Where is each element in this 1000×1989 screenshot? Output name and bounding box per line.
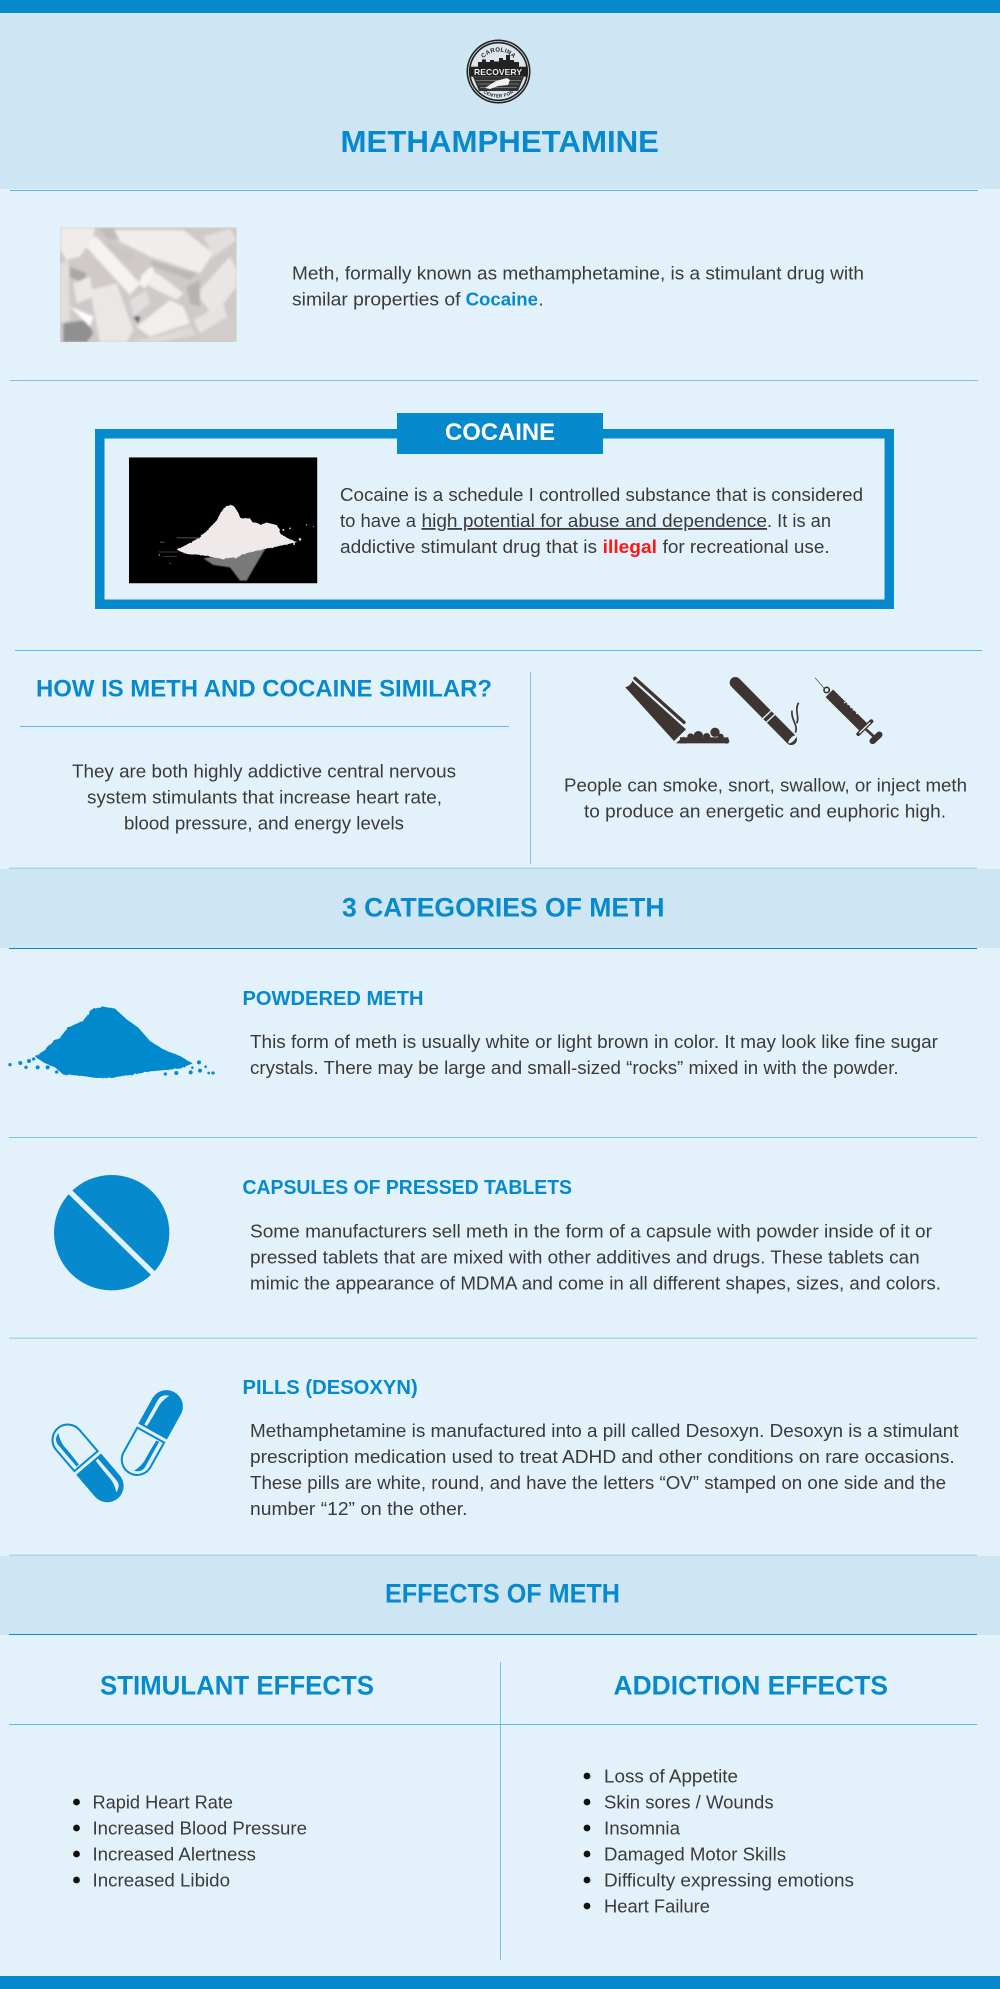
list: addiction effects: Insomnia bbox=[604, 1818, 681, 1838]
cocaine description: to have a bbox=[340, 511, 417, 531]
cocaine description bbox=[340, 485, 863, 557]
intro text: similar properties of bbox=[292, 290, 462, 310]
intro text: . bbox=[538, 290, 544, 310]
heading: 3 categories: 3 CATEGORIES OF METH bbox=[342, 893, 664, 923]
logo: Carolina Recovery Center: RECOVERY bbox=[474, 67, 522, 77]
divider bbox=[9, 1137, 977, 1138]
list: addiction effects: Loss of Appetite bbox=[604, 1766, 738, 1786]
list: addiction effects: Skin sores / Wounds bbox=[604, 1792, 774, 1812]
divider bbox=[9, 1338, 977, 1339]
cocaine description: . It is an bbox=[767, 511, 831, 531]
icon: snorting tube and powder bbox=[624, 678, 729, 744]
cocaine description: Cocaine is a schedule I controlled substance that is considered bbox=[340, 485, 863, 505]
intro text bbox=[292, 264, 864, 310]
list: addiction effects: Difficulty expressing emotions bbox=[604, 1870, 854, 1890]
cocaine description: illegal bbox=[603, 537, 657, 557]
category: capsules of pressed tablets bbox=[242, 1177, 941, 1294]
vertical divider bbox=[500, 1662, 501, 1960]
list: addiction effects: Damaged Motor Skills bbox=[604, 1844, 786, 1864]
icon: syringe bbox=[815, 678, 879, 741]
vertical divider bbox=[530, 672, 531, 864]
right pill bbox=[115, 1384, 189, 1481]
icons: snort, smoke, inject bbox=[624, 678, 879, 745]
heading: addiction effects: ADDICTION EFFECTS bbox=[614, 1670, 888, 1700]
icon: two capsule pills bbox=[45, 1384, 189, 1509]
heading: how similar: HOW IS METH AND COCAINE SIMILAR? bbox=[36, 676, 492, 702]
photo: cocaine pile bbox=[129, 457, 317, 583]
list: stimulant effects: Increased Blood Pressure bbox=[92, 1818, 307, 1838]
icon: cigarette bbox=[735, 683, 799, 745]
list: addiction effects: Heart Failure bbox=[604, 1896, 710, 1916]
routes text bbox=[564, 776, 967, 822]
similarity text: system stimulants that increase heart rate, bbox=[87, 788, 442, 808]
cocaine description: high potential for abuse and dependence bbox=[422, 511, 767, 531]
divider bbox=[15, 650, 982, 651]
list: stimulant effects: Rapid Heart Rate bbox=[92, 1792, 233, 1812]
category: capsules of pressed tablets: CAPSULES OF PRESSED TABLETS bbox=[242, 1177, 572, 1199]
section band: effects bbox=[0, 1554, 1000, 1635]
category: capsules of pressed tablets: pressed tablets that are mixed with other additives and drugs. These tablets can bbox=[250, 1248, 920, 1268]
intro text: Cocaine bbox=[466, 290, 538, 310]
cocaine label bbox=[397, 413, 603, 454]
category: powdered meth: This form of meth is usually white or light brown in color. It may look like fine sugar bbox=[250, 1032, 938, 1052]
list: addiction effects bbox=[584, 1766, 854, 1916]
intro text: Meth, formally known as methamphetamine, is a stimulant drug with bbox=[292, 264, 864, 284]
divider bbox=[10, 190, 978, 191]
logo: Carolina Recovery Center bbox=[466, 40, 530, 104]
photo: meth crystals bbox=[60, 227, 237, 342]
icon: tablet bbox=[54, 1175, 169, 1290]
category: pills (desoxyn) bbox=[242, 1377, 958, 1519]
similarity text bbox=[72, 762, 456, 834]
top bar bbox=[0, 0, 1000, 13]
left pill bbox=[45, 1418, 130, 1509]
cocaine box border bbox=[100, 434, 889, 604]
category: pills (desoxyn): Methamphetamine is manufactured into a pill called Desoxyn. Desoxyn is a stimulant bbox=[250, 1421, 958, 1441]
category: capsules of pressed tablets: mimic the appearance of MDMA and come in all different shapes, sizes, and colors. bbox=[250, 1274, 941, 1294]
title: METHAMPHETAMINE bbox=[340, 124, 659, 159]
category: powdered meth: crystals. There may be large and small-sized “rocks” mixed in with the powder. bbox=[250, 1058, 899, 1078]
heading: effects of meth: EFFECTS OF METH bbox=[385, 1579, 620, 1609]
panel: cocaine bbox=[100, 413, 889, 604]
divider bbox=[20, 726, 509, 727]
category: pills (desoxyn): These pills are white, round, and have the letters “OV” stamped on one side and the bbox=[250, 1473, 946, 1493]
list: stimulant effects: Increased Libido bbox=[92, 1870, 230, 1890]
category: pills (desoxyn): PILLS (DESOXYN) bbox=[242, 1377, 418, 1399]
logo: Carolina Recovery Center: CENTER FOR bbox=[484, 90, 514, 98]
divider bbox=[10, 380, 978, 381]
header band bbox=[0, 13, 1000, 189]
category: pills (desoxyn): prescription medication used to treat ADHD and other conditions on rare occasions. bbox=[250, 1447, 955, 1467]
cocaine description: addictive stimulant drug that is bbox=[340, 537, 597, 557]
cocaine description: for recreational use. bbox=[663, 537, 830, 557]
similarity text: They are both highly addictive central nervous bbox=[72, 762, 456, 782]
category: pills (desoxyn): number “12” on the other. bbox=[250, 1499, 468, 1519]
routes text: to produce an energetic and euphoric high. bbox=[584, 802, 946, 822]
logo: Carolina Recovery Center: CAROLINA bbox=[481, 47, 515, 58]
heading: stimulant effects: STIMULANT EFFECTS bbox=[100, 1670, 374, 1700]
section band: 3 categories bbox=[0, 868, 1000, 949]
category: powdered meth: POWDERED METH bbox=[242, 988, 424, 1010]
cocaine label: COCAINE bbox=[445, 419, 555, 446]
divider bbox=[9, 1724, 977, 1725]
icon: powder pile bbox=[8, 1007, 215, 1078]
category: capsules of pressed tablets: Some manufacturers sell meth in the form of a capsule with powder inside of it or bbox=[250, 1222, 932, 1242]
routes text: People can smoke, snort, swallow, or inject meth bbox=[564, 776, 967, 796]
bottom bar bbox=[0, 1976, 1000, 1989]
similarity text: blood pressure, and energy levels bbox=[124, 814, 404, 834]
list: stimulant effects bbox=[73, 1792, 307, 1890]
category: powdered meth bbox=[242, 988, 938, 1078]
list: stimulant effects: Increased Alertness bbox=[92, 1844, 256, 1864]
